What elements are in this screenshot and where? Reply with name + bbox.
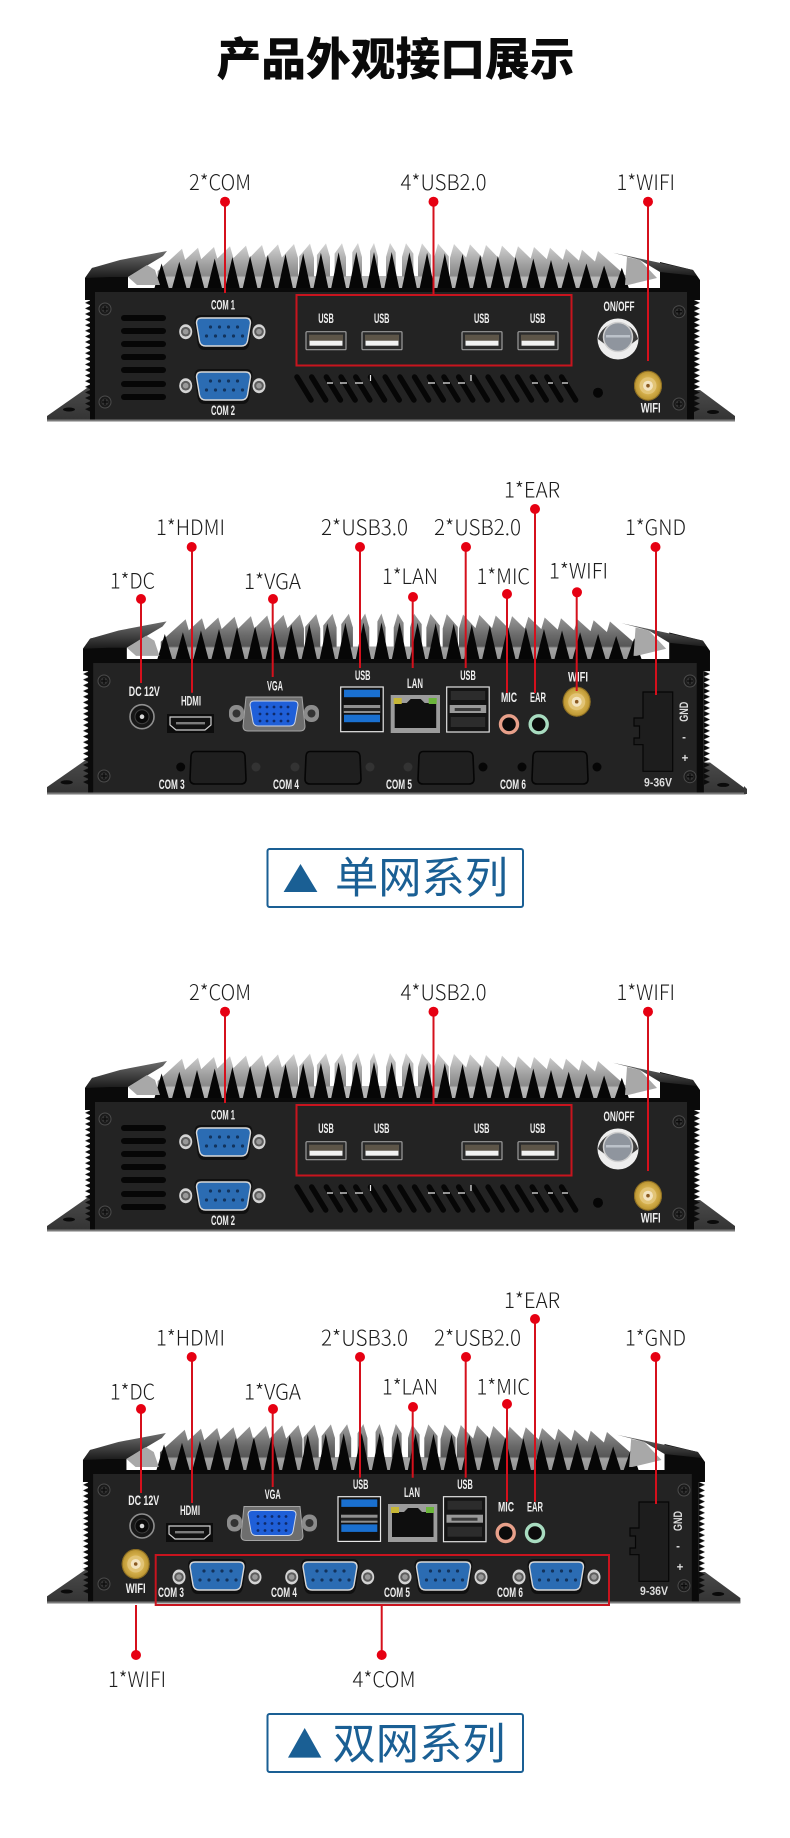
callout: 1*HDMI: 1*HDMI [156,1322,225,1352]
port legends: COM 6 [500,777,526,792]
callout: 1*DC [110,1376,155,1493]
port legends: + [682,753,689,765]
port legends: - [676,1541,680,1553]
panel: dual-LAN unit, front view [47,1053,735,1232]
callout: 1*LAN: 1*LAN [382,1372,438,1402]
port legends: ON/OFF [604,1109,634,1124]
callout: 1*GND: 1*GND [625,1322,686,1352]
callout: 2*USB3.0 [321,1322,408,1478]
port legends: DC 12V [128,1493,159,1508]
callout: 1*EAR: 1*EAR [504,1285,560,1315]
port legends: 9-36V [644,778,672,790]
callout: 1*VGA: 1*VGA [244,566,302,596]
port legends: MIC [501,690,517,705]
callout: 1*EAR [504,475,560,693]
callout: 1*MIC [476,561,530,693]
callout: 1*WIFI [616,977,675,1171]
port legends: USB [353,1477,369,1492]
port legends: WIFI [568,670,588,685]
callout: 1*WIFI: 1*WIFI [616,167,675,197]
callout: 1*DC: 1*DC [110,565,155,595]
port legends: VGA [265,1487,281,1502]
port legends: DC 12V [129,684,160,699]
callout: 1*HDMI [156,1322,225,1503]
callout: 2*USB3.0: 2*USB3.0 [321,512,408,542]
port legends: COM 5 [386,777,412,792]
port legends: WIFI [641,1211,661,1226]
port legends: GND [679,702,691,722]
callout: 2*USB2.0: 2*USB2.0 [434,1322,521,1352]
port legends: WIFI [641,401,661,416]
chassis [47,1061,735,1232]
port legends: COM 2 [211,1213,235,1228]
panel: single-LAN unit, front view [47,243,735,422]
port legends: MIC [498,1500,514,1515]
callout: 2*COM [189,977,251,1103]
callout: 1*MIC: 1*MIC [476,1372,530,1402]
port legends: USB [474,1121,490,1136]
callout: 1*WIFI [616,167,675,361]
callout: 1*VGA [244,566,302,677]
series tag: 单网系列: 单网系列 [335,844,508,906]
chassis [40,621,747,800]
port legends: + [677,1562,684,1574]
panel: single-LAN unit, rear view [40,614,747,800]
callout: 4*USB2.0 with highlight box [296,977,572,1176]
port legends: COM 4 [271,1585,297,1600]
port legends [211,1107,661,1228]
callout: 1*LAN [382,561,438,668]
port legends [211,297,661,418]
callout: 4*USB2.0 with highlight box: 4*USB2.0 [400,977,486,1007]
callout: 2*USB3.0 [321,512,408,668]
callout: 2*USB2.0 [434,1322,521,1478]
port legends: COM 1 [211,297,235,312]
port legends: GND [673,1511,685,1531]
callout: 1*EAR [504,1285,560,1502]
heat-sink fins [157,614,642,662]
port legends: COM 3 [159,777,185,792]
callout: 1*DC [110,565,155,683]
port legends: USB [530,311,546,326]
port legends: WIFI [126,1581,146,1596]
callout: 4*COM with highlight box: 4*COM [352,1664,416,1694]
port legends: USB [530,1121,546,1136]
port legends: EAR [530,690,546,705]
callout: 4*USB2.0 with highlight box: 4*USB2.0 [400,167,486,197]
port legends: COM 6 [497,1585,523,1600]
ports and connectors [99,1113,685,1220]
port legends: HDMI [181,694,201,709]
callout: 1*VGA [244,1376,302,1487]
port legends: USB [318,311,334,326]
chassis [47,251,735,422]
series tag: 单网系列 [268,844,523,907]
callout: 1*MIC: 1*MIC [476,561,530,591]
callout: 2*COM: 2*COM [189,167,251,197]
callout: 4*USB2.0 with highlight box [296,167,572,366]
panel: dual-LAN unit, rear view [40,1424,740,1610]
port legends: USB [374,311,390,326]
callout: 2*USB3.0: 2*USB3.0 [321,1322,408,1352]
port legends: HDMI [180,1503,200,1518]
callout: 1*WIFI: 1*WIFI [549,556,608,586]
callout: 1*WIFI [549,556,608,691]
port legends: COM 2 [211,403,235,418]
heat-sink fins [154,243,630,291]
callout: 2*USB2.0 [434,512,521,668]
callout: 1*GND [625,1322,686,1504]
port legends: COM 5 [384,1585,410,1600]
callout: 2*USB2.0: 2*USB2.0 [434,512,521,542]
port legends: COM 4 [273,777,299,792]
callout: 1*VGA: 1*VGA [244,1376,302,1406]
port legends: LAN [407,676,423,691]
title: 产品外观接口展示 [216,23,574,88]
callout: 1*LAN: 1*LAN [382,561,438,591]
callout: 1*DC: 1*DC [110,1376,155,1406]
callout: 4*COM with highlight box [156,1555,609,1694]
port legends: COM 1 [211,1107,235,1122]
port legends: LAN [404,1485,420,1500]
callout: 1*EAR: 1*EAR [504,475,560,505]
port legends: USB [355,668,371,683]
callout: 1*HDMI: 1*HDMI [156,512,225,542]
series tag: 双网系列: 双网系列 [332,1710,506,1772]
chassis [40,1433,740,1610]
series tag: 双网系列 [268,1710,523,1772]
callout: 1*WIFI, below: 1*WIFI [108,1664,166,1694]
heat-sink fins [154,1053,630,1101]
port legends: USB [474,311,490,326]
port legends [129,668,691,792]
port legends: USB [460,668,476,683]
callout: 2*COM [189,167,251,293]
port legends: - [682,732,686,744]
callout: 1*WIFI: 1*WIFI [616,977,675,1007]
port legends: USB [457,1477,473,1492]
ports and connectors [98,1484,690,1594]
callout: 1*MIC [476,1372,530,1502]
ports and connectors [98,675,696,784]
port legends [126,1477,685,1600]
port legends: ON/OFF [604,299,634,314]
port legends: USB [374,1121,390,1136]
callout: 1*LAN [382,1372,438,1478]
port legends: VGA [267,679,283,694]
port legends: COM 3 [158,1585,184,1600]
ports and connectors [99,303,685,410]
port legends: USB [318,1121,334,1136]
callout: 1*HDMI [156,512,225,693]
port legends: 9-36V [640,1586,668,1598]
heat-sink fins [156,1424,639,1472]
callout: 1*WIFI, below [108,1605,166,1694]
callout: 1*GND: 1*GND [625,512,686,542]
port legends: EAR [527,1500,543,1515]
callout: 2*COM: 2*COM [189,977,251,1007]
callout: 1*GND [625,512,686,695]
